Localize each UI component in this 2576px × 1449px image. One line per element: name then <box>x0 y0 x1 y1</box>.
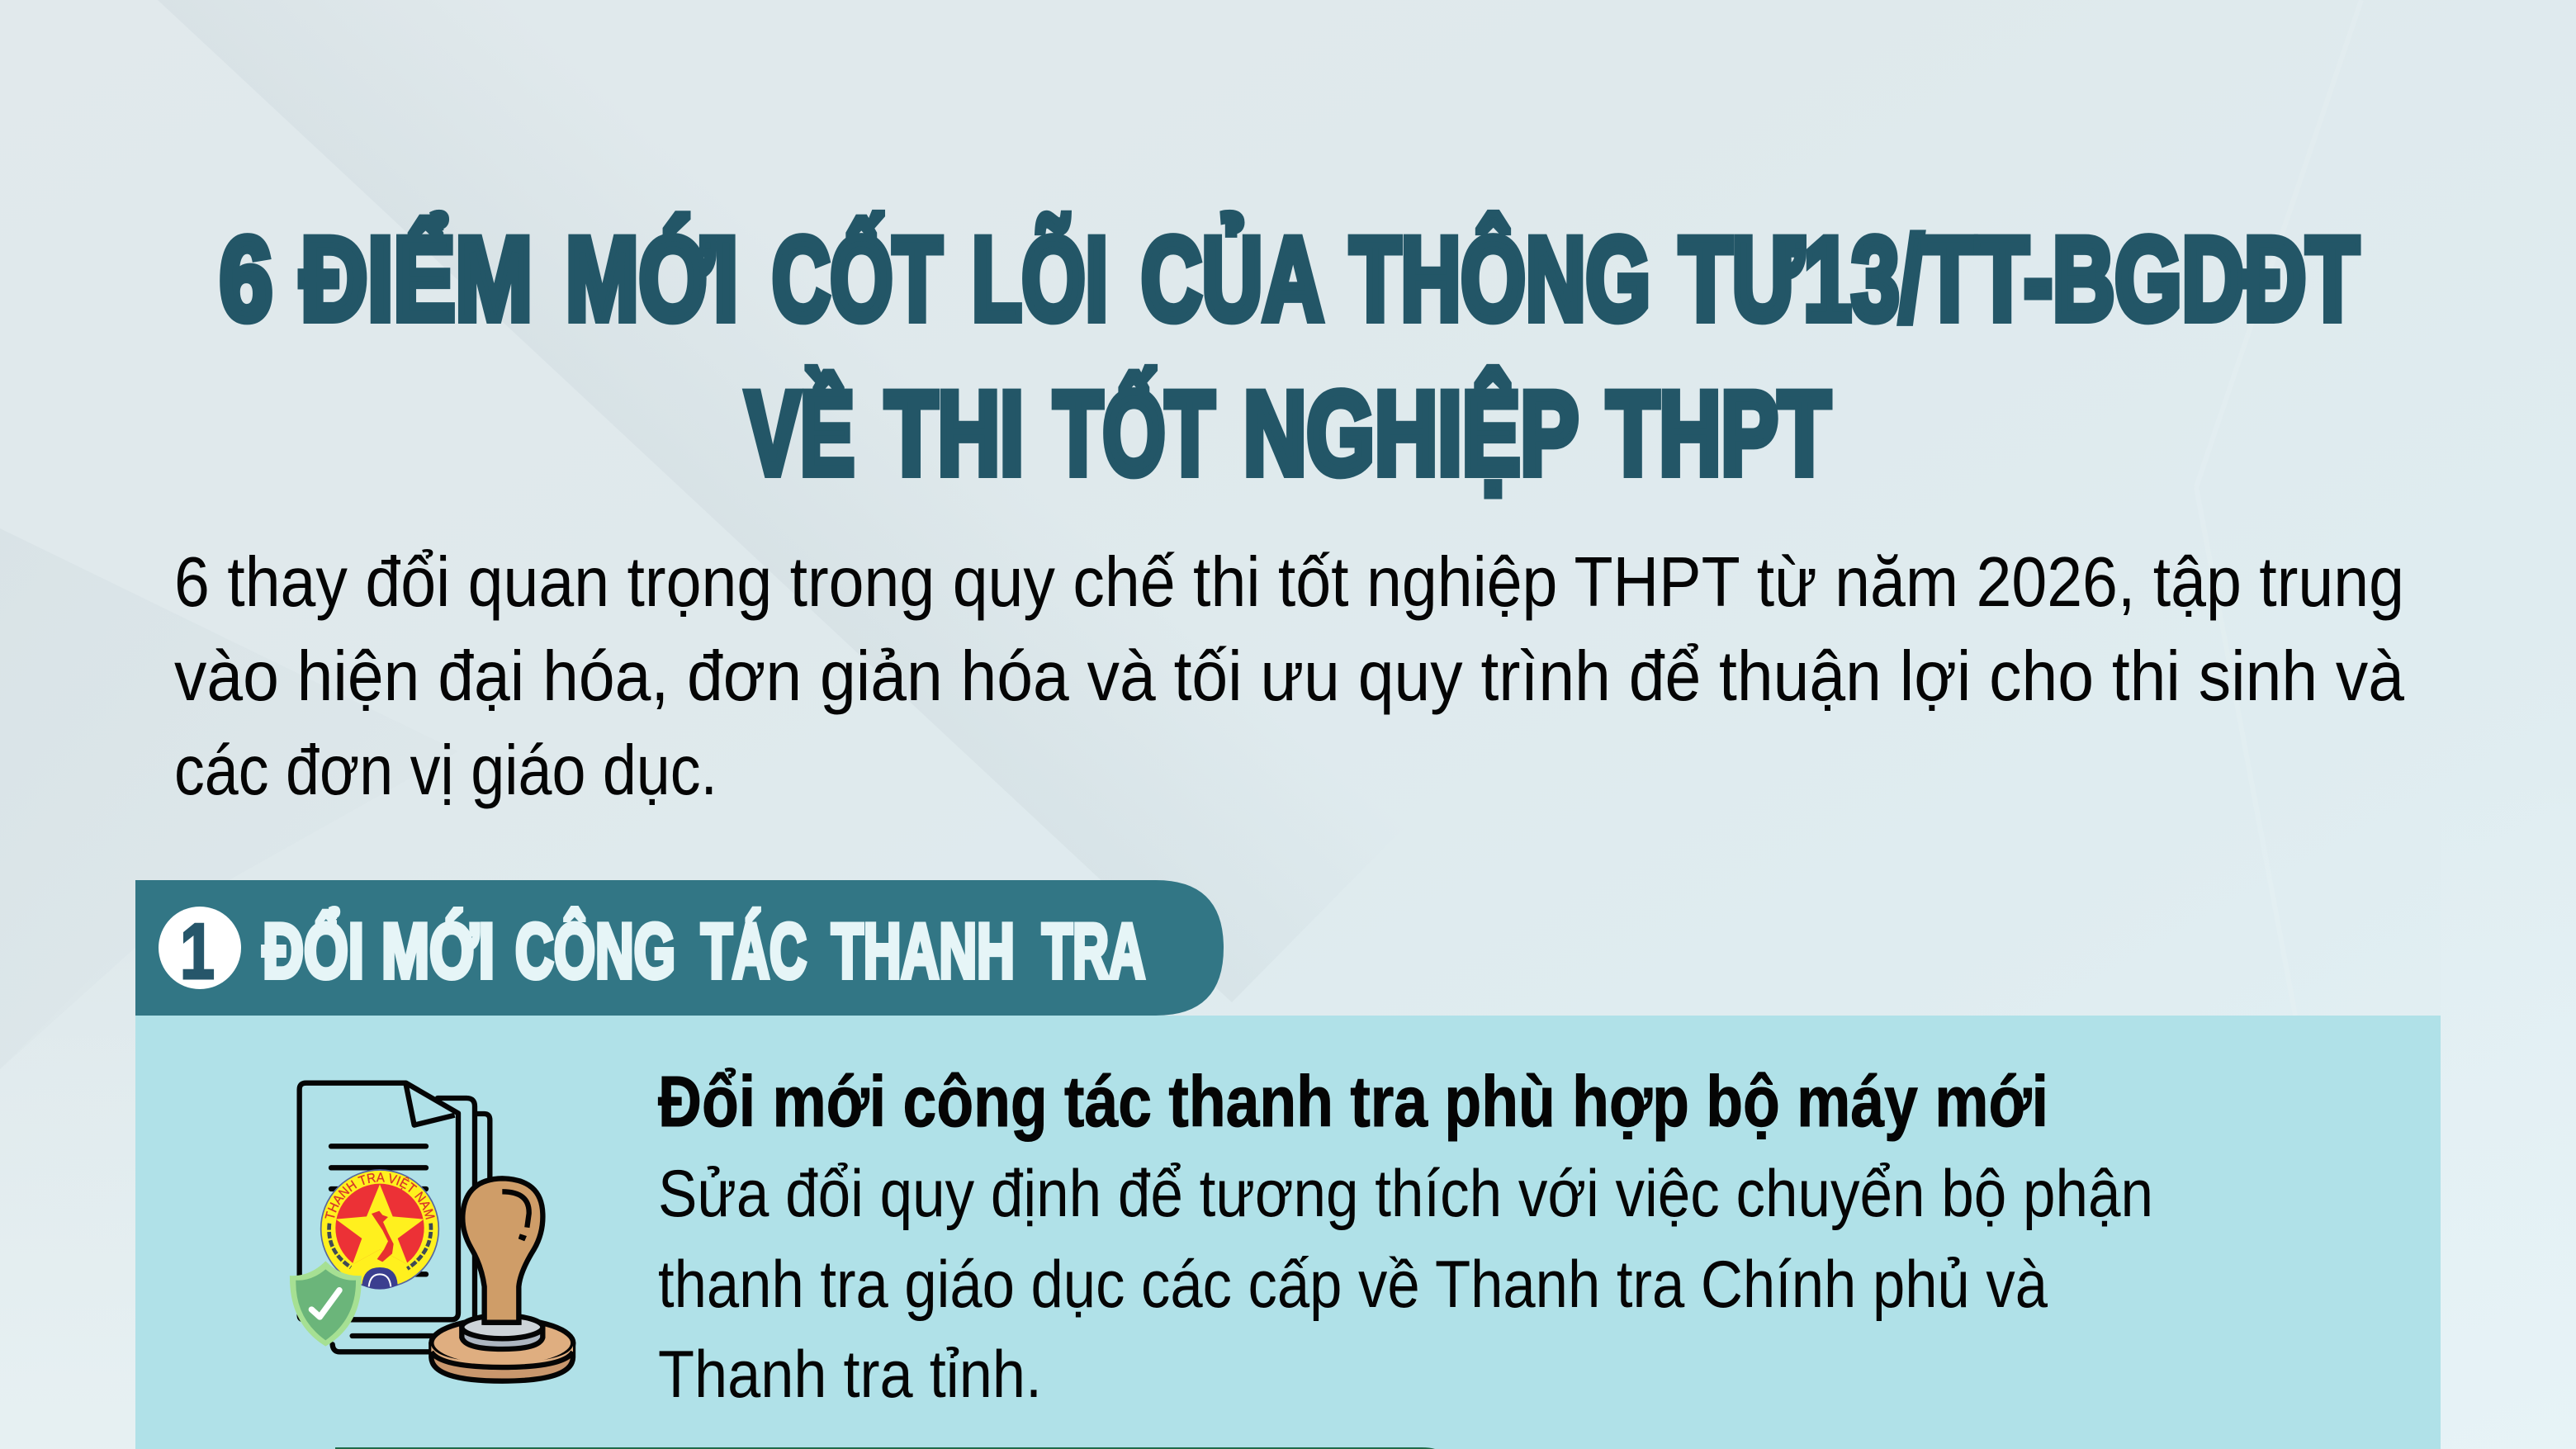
front page <box>300 1083 458 1319</box>
title: CỐT <box>772 213 942 345</box>
title: VỀ <box>746 368 855 500</box>
title: NGHIỆP <box>1243 368 1579 500</box>
number badge: 1 <box>180 907 215 996</box>
title: THPT <box>1607 368 1830 500</box>
item body text: thanh tra giáo dục các cấp về Thanh tra Chính phủ và <box>658 1248 2048 1322</box>
panel: section 1 content <box>135 1016 2441 1449</box>
intro text: các đơn vị giáo dục. <box>174 732 717 810</box>
icon: green shield with check <box>290 1261 362 1347</box>
section 1 banner <box>135 880 1224 1016</box>
title <box>220 213 2359 500</box>
intro text: 6 thay đổi quan trọng trong quy chế thi tốt nghiệp THPT từ năm 2026, tập trung <box>174 543 2404 622</box>
title: 6 <box>220 214 272 345</box>
banner heading: THANH <box>831 907 1015 994</box>
icon: rubber stamp <box>431 1178 573 1381</box>
title: MỚI <box>566 214 738 345</box>
item heading: Đổi mới công tác thanh tra phù hợp bộ máy mới <box>658 1062 2048 1142</box>
title: ĐIỂM <box>301 214 533 345</box>
title: TỐT <box>1054 367 1215 500</box>
title: CỦA <box>1141 213 1324 345</box>
banner heading: TÁC <box>701 907 807 994</box>
banner heading: TRA <box>1042 907 1145 994</box>
banner heading: CÔNG <box>515 907 675 994</box>
intro text <box>174 543 2405 810</box>
item body text: Thanh tra tỉnh. <box>658 1338 1042 1412</box>
back pages <box>333 1098 490 1352</box>
title: THI <box>885 368 1024 500</box>
emblem: Thanh Tra Việt Nam: THANH TRA VIỆT NAM <box>324 1172 435 1219</box>
title: LÕI <box>972 214 1108 345</box>
emblem: Thanh Tra Việt Nam <box>320 1169 439 1290</box>
item body text: Sửa đổi quy định để tương thích với việc chuyển bộ phận <box>658 1157 2153 1231</box>
intro text: vào hiện đại hóa, đơn giản hóa và tối ưu quy trình để thuận lợi cho thi sinh và <box>174 637 2405 716</box>
banner heading: ĐỔI <box>263 907 364 994</box>
title: THÔNG <box>1350 213 1650 345</box>
icon: inspection documents with stamp and shield <box>290 1080 576 1384</box>
number badge <box>159 907 241 996</box>
next card top edge <box>335 1447 1435 1449</box>
banner heading <box>263 907 1145 994</box>
document lines <box>331 1146 426 1274</box>
banner heading: MỚI <box>381 907 495 994</box>
item body text <box>658 1157 2153 1412</box>
